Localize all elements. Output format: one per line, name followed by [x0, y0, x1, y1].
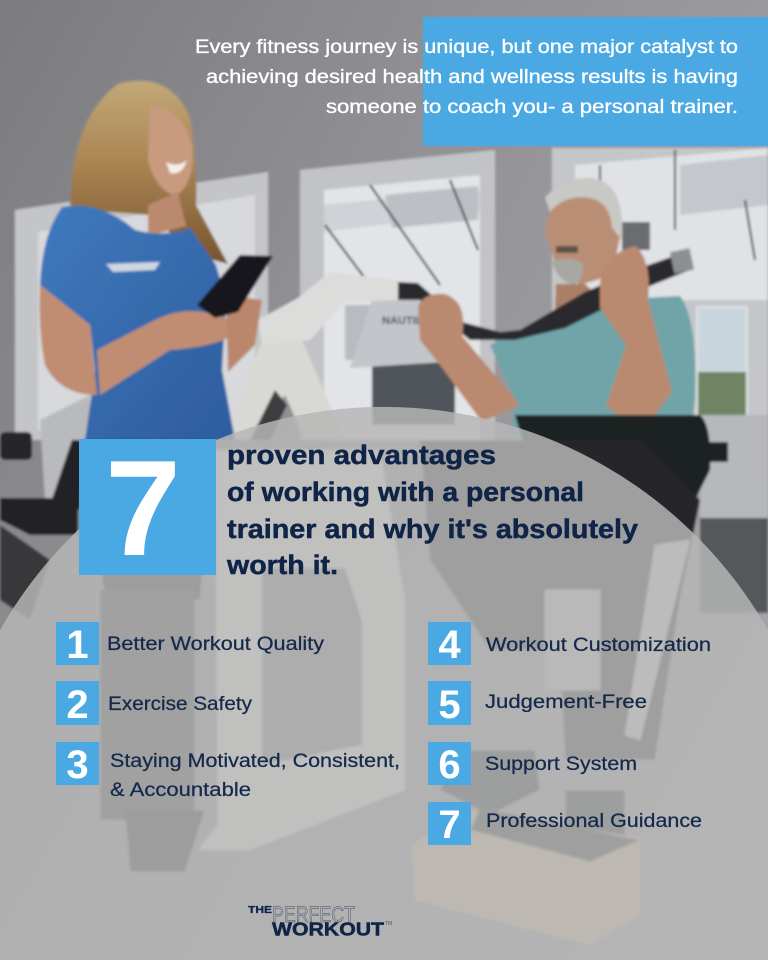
list item 4 — [428, 622, 711, 667]
intro text: achieving desired health and wellness results is having — [206, 67, 738, 88]
heading: proven advantages — [227, 440, 496, 470]
heading: trainer and why it's absolutely — [227, 514, 638, 544]
heading — [226, 440, 638, 580]
list item 7: 7 — [438, 803, 461, 847]
list item 7: Professional Guidance — [486, 811, 702, 832]
heading: worth it. — [226, 550, 338, 580]
list item 5: 5 — [438, 683, 461, 727]
list item 1 — [56, 622, 325, 667]
list item 6: Support System — [485, 754, 637, 775]
floor right — [700, 415, 768, 520]
list item 3: & Accountable — [110, 780, 251, 801]
window frames — [15, 148, 768, 440]
list item 5 — [428, 681, 647, 727]
list item 4: 4 — [438, 623, 461, 667]
man — [398, 178, 695, 510]
list item 6 — [428, 742, 637, 787]
list item 2: 2 — [66, 683, 89, 727]
heading: of working with a personal — [227, 477, 584, 507]
logo: The Perfect Workout — [248, 902, 392, 940]
logo: The Perfect Workout: THE — [248, 905, 272, 916]
list item 1: Better Workout Quality — [107, 634, 325, 655]
logo: The Perfect Workout: WORKOUT — [272, 918, 385, 940]
left machine — [0, 395, 90, 620]
exercise bar — [398, 252, 690, 340]
intro text: Every fitness journey is unique, but one major catalyst to — [195, 37, 738, 58]
list item 6: 6 — [438, 743, 461, 787]
list item 3: Staying Motivated, Consistent, — [110, 751, 400, 772]
list item 4: Workout Customization — [486, 635, 711, 656]
big number 7 block: 7 — [105, 432, 181, 584]
list item 1: 1 — [66, 623, 89, 667]
translucent circular overlay panel — [0, 407, 768, 960]
list item 7 — [428, 802, 702, 847]
list item 3: 3 — [66, 743, 89, 787]
intro blue panel — [423, 17, 768, 146]
lower legs and equipment — [100, 440, 700, 945]
list item 5: Judgement-Free — [485, 692, 647, 713]
machine: white frame and Nautilus unit — [226, 272, 455, 440]
bench pad — [515, 415, 710, 500]
intro text — [195, 37, 738, 118]
list item 2 — [56, 681, 253, 727]
logo: The Perfect Workout: TM — [385, 921, 392, 927]
list item 2: Exercise Safety — [108, 694, 253, 715]
big number 7 block — [79, 432, 216, 584]
list item 3 — [56, 742, 400, 801]
woman — [40, 81, 273, 600]
logo: The Perfect Workout: PERFECT — [272, 902, 355, 927]
machine: white frame and Nautilus unit: NAUTILUS — [382, 315, 438, 327]
intro text: someone to coach you- a personal trainer. — [326, 97, 738, 118]
